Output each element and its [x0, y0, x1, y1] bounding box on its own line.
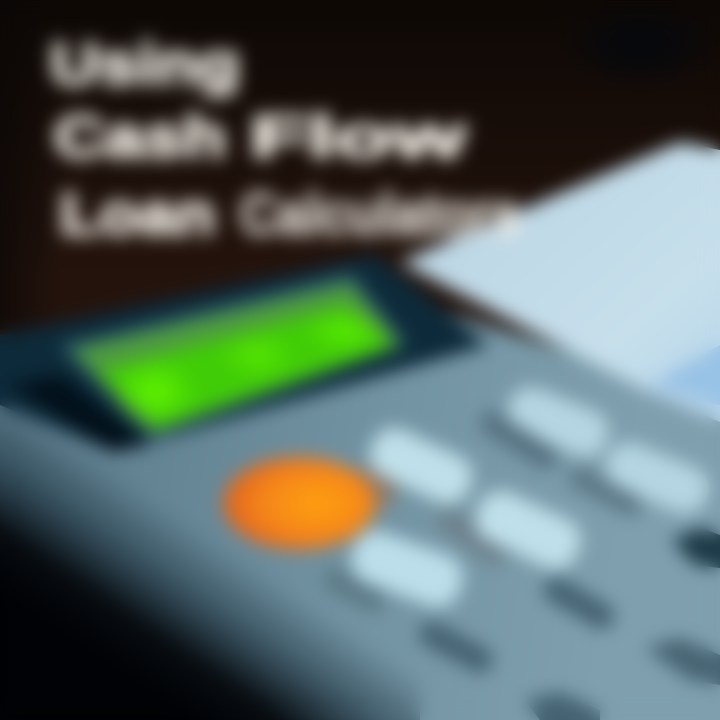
orange button [223, 457, 375, 549]
display bezel [0, 255, 488, 452]
calculator body [0, 290, 720, 720]
title line 3: Calculators [240, 182, 520, 247]
title line 3 [60, 182, 520, 247]
title text [50, 32, 520, 247]
paper sheet [400, 142, 720, 422]
title line 2: Cash [54, 105, 226, 170]
bottom-left shadow [0, 400, 420, 720]
keypad keys [344, 380, 715, 614]
green display [72, 283, 400, 432]
title line 3: Loan [60, 182, 215, 247]
title line 2: Flow [250, 105, 467, 170]
shading between orange button and keys [340, 468, 512, 570]
title line 1: Using [50, 32, 240, 97]
title line 2 [54, 105, 467, 170]
dark key slots [320, 407, 720, 720]
